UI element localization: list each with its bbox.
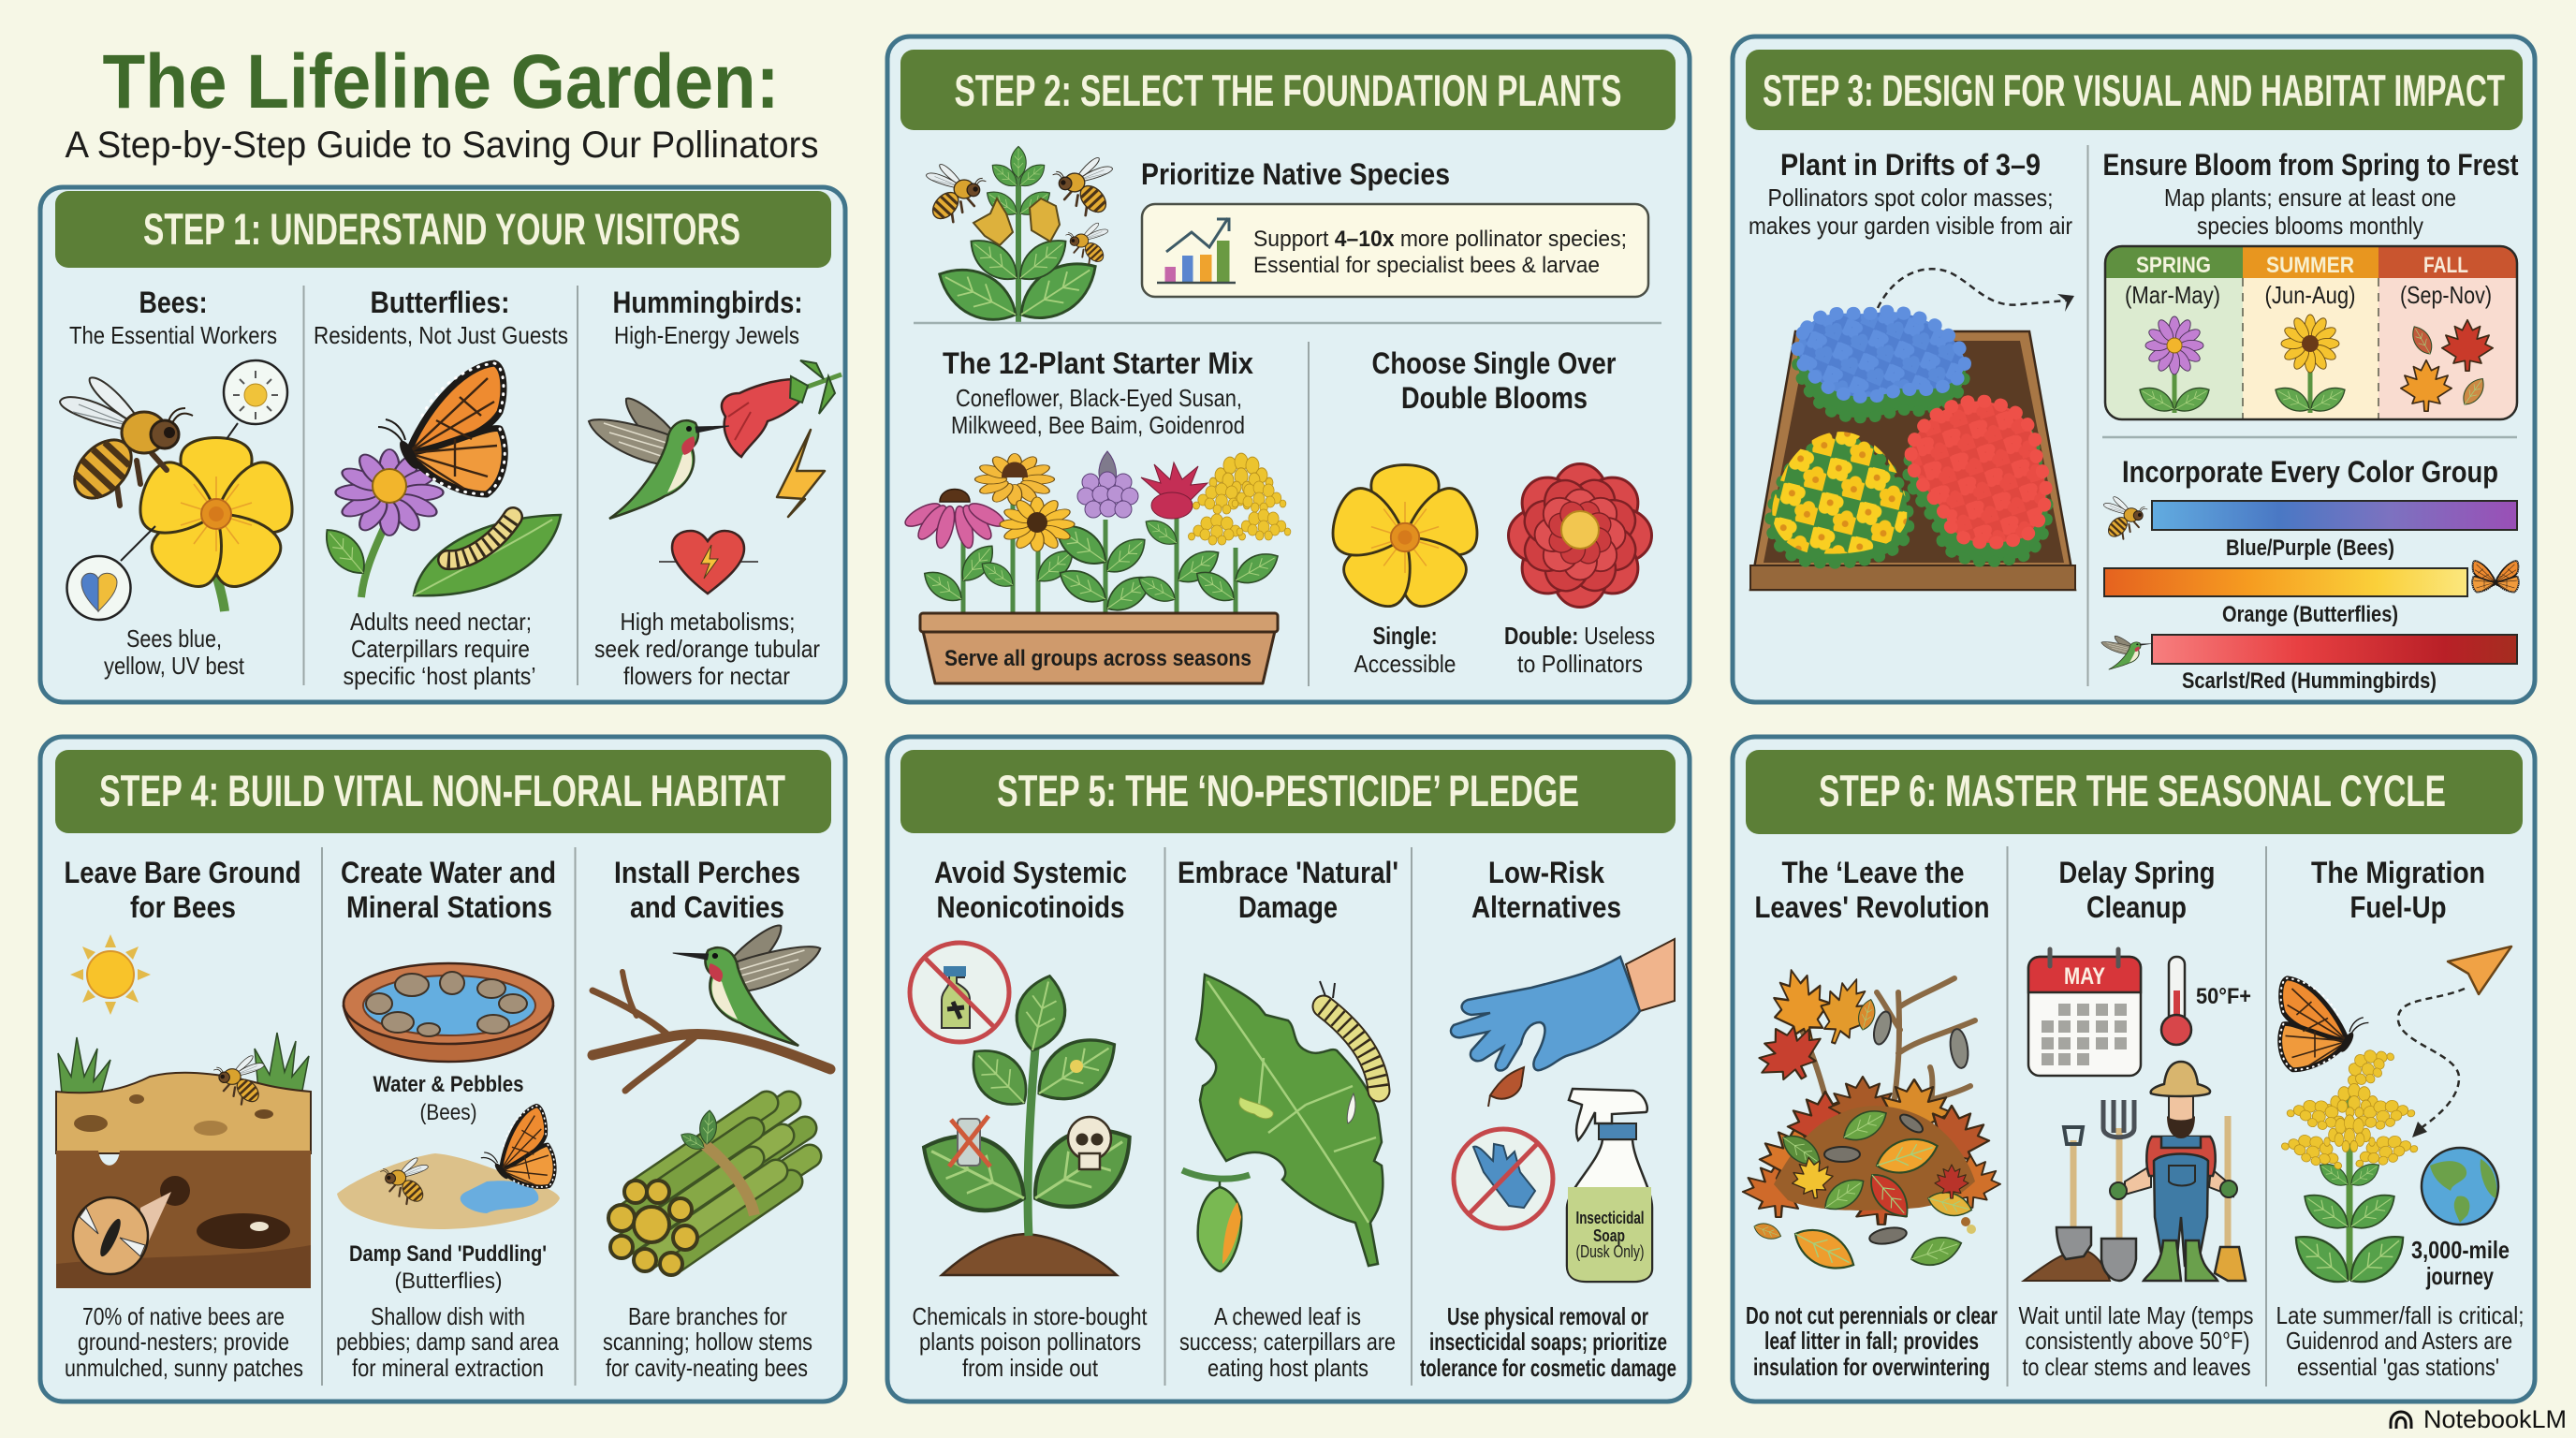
alternatives note: [1420, 1302, 1676, 1382]
hummingbirds note: flowers for nectar: [623, 662, 790, 690]
panel frame: [40, 187, 845, 702]
natural damage heading: Embrace 'Natural': [1178, 856, 1398, 889]
neonicotinoids heading: Avoid Systemic: [934, 856, 1127, 889]
color bar: hummingbirds: [2101, 635, 2517, 694]
water note: Shallow dish with: [371, 1302, 525, 1330]
bees subheading: The Essential Workers: [69, 321, 277, 349]
icon: sun vision bubble: [224, 360, 287, 439]
cleanup note: [2018, 1301, 2254, 1381]
journey label: journey: [2425, 1262, 2494, 1290]
panel: step 6 master the seasonal cycle: [1733, 737, 2535, 1401]
perches note: Bare branches for: [628, 1302, 787, 1330]
season table: SPRING: [2136, 253, 2211, 278]
migration heading: [2311, 856, 2485, 924]
water note: pebbies; damp sand area: [336, 1328, 559, 1356]
icon: blue yellow heart bubble: [67, 526, 155, 620]
step 2 header: STEP 2: SELECT THE FOUNDATION PLANTS: [955, 66, 1621, 115]
alternatives note: tolerance for cosmetic damage: [1420, 1354, 1676, 1382]
icon: double bloom: [1504, 460, 1656, 611]
natural damage note: success; caterpillars are: [1179, 1328, 1396, 1356]
prioritize native species heading: Prioritize Native Species: [1141, 157, 1450, 191]
icon: chrysalis: [1182, 1170, 1250, 1271]
icon: thermometer 50F: [2161, 957, 2251, 1045]
bees heading: Bees:: [139, 286, 208, 319]
step 1 header: [55, 191, 831, 268]
icon: heart with bolt: [659, 531, 758, 594]
water heading: Mineral Stations: [346, 890, 552, 924]
panel: step 2 select the foundation plants: [887, 37, 1690, 702]
icon: hummingbird: [589, 398, 729, 519]
butterflies note: [343, 608, 535, 690]
migration note: essential 'gas stations': [2297, 1353, 2499, 1381]
bloom text: species blooms monthly: [2197, 212, 2423, 240]
icon: native plant with bees: [927, 146, 1112, 333]
neonicotinoids note: plants poison pollinators: [919, 1328, 1141, 1356]
cleanup note: Wait until late May (temps: [2018, 1301, 2254, 1329]
icon: summer flower: [2271, 315, 2349, 418]
bloom text: Map plants; ensure at least one: [2164, 183, 2456, 212]
icon: gloved hand removing leaf: [1451, 939, 1675, 1107]
double label: [1504, 622, 1655, 678]
alternatives note: Use physical removal or: [1447, 1302, 1648, 1330]
icon: fall leaves: [2401, 320, 2493, 411]
icon: insecticidal soap bottle: (Dusk Only): [1576, 1242, 1644, 1261]
column: butterflies: [314, 286, 568, 690]
icon: sun: [70, 934, 151, 1015]
icon: spring flower: [2135, 316, 2214, 418]
subtitle: A Step-by-Step Guide to Saving Our Pollinators: [66, 125, 818, 166]
icon: yellow flower with stem: [133, 438, 300, 611]
season table: (Mar-May): [2125, 281, 2220, 309]
step 5 header: STEP 5: THE ‘NO-PESTICIDE’ PLEDGE: [997, 766, 1579, 815]
arrow: migration route: [2398, 989, 2465, 1137]
step 2 header: [900, 50, 1676, 130]
cleanup heading: Cleanup: [2086, 890, 2187, 924]
perches note: for cavity-neating bees: [606, 1354, 808, 1382]
bare ground note: 70% of native bees are: [82, 1302, 285, 1330]
cleanup heading: [2059, 856, 2215, 924]
perches note: [603, 1302, 812, 1382]
starter mix list: [951, 384, 1245, 439]
column: neonicotinoids: [908, 856, 1149, 1382]
journey label: 3,000-mile: [2411, 1236, 2510, 1264]
column: perches and cavities: [593, 856, 830, 1382]
notebooklm logo: NotebookLM: [2423, 1405, 2567, 1433]
panel: step 4 build vital non-floral habitat: [40, 737, 845, 1401]
choose single heading: Choose Single Over: [1372, 346, 1616, 380]
title: The Lifeline Garden:: [103, 39, 779, 125]
neonicotinoids note: from inside out: [962, 1354, 1099, 1382]
step 5 header: [900, 750, 1676, 833]
panel frame: [1733, 737, 2535, 1401]
icon: growth chart: [1157, 218, 1236, 283]
column: water and mineral stations: [336, 856, 560, 1382]
choose single heading: [1372, 346, 1616, 415]
hummingbirds heading: Hummingbirds:: [612, 286, 803, 319]
panel: step 5 the no-pesticide pledge: [887, 737, 1690, 1401]
column: leave the leaves: [1743, 856, 2000, 1381]
hummingbirds note: [594, 608, 820, 690]
icon: monarch on goldenrod: [2280, 978, 2368, 1070]
butterflies subheading: Residents, Not Just Guests: [314, 321, 568, 349]
icon: insecticidal soap bottle: [1567, 1089, 1652, 1282]
icon: gardener: [2110, 1062, 2237, 1281]
leaves heading: [1754, 856, 1990, 924]
leaves note: Do not cut perennials or clear: [1746, 1301, 1998, 1329]
planter box: [920, 613, 1278, 683]
sand label: Damp Sand 'Puddling': [349, 1241, 547, 1267]
alternatives note: insecticidal soaps; prioritize: [1429, 1328, 1667, 1356]
column: natural damage: [1178, 856, 1398, 1382]
cleanup note: consistently above 50°F): [2026, 1327, 2250, 1355]
leaves note: leaf litter in fall; provides: [1764, 1327, 1979, 1355]
bare ground heading: Leave Bare Ground: [64, 856, 301, 889]
double label: to Pollinators: [1517, 650, 1643, 678]
callout text: Support 4–10x more pollinator species;: [1253, 227, 1627, 252]
icon: thermometer 50F: 50°F+: [2196, 984, 2251, 1009]
color bar: butterflies: Orange (Butterflies): [2222, 602, 2398, 627]
season table: (Sep-Nov): [2400, 281, 2492, 309]
bare ground heading: [64, 856, 301, 924]
bees note: Sees blue,: [126, 624, 222, 653]
bloom text: [2164, 183, 2456, 240]
neonicotinoids note: Chemicals in store-bought: [912, 1302, 1148, 1330]
column: bare ground: [56, 856, 311, 1382]
color group heading: Incorporate Every Color Group: [2122, 455, 2498, 489]
hummingbirds subheading: High-Energy Jewels: [614, 321, 799, 349]
water heading: Create Water and: [341, 856, 556, 889]
panel frame: [887, 737, 1690, 1401]
sand label: [349, 1241, 547, 1294]
icon: paper plane: [2448, 946, 2511, 994]
color bar: hummingbirds: Scarlst/Red (Hummingbirds): [2182, 668, 2437, 694]
migration note: Guidenrod and Asters are: [2286, 1327, 2512, 1355]
perches heading: and Cavities: [630, 890, 784, 924]
icon: hollow stem bundle: [608, 1103, 810, 1275]
icon: flowers in planter: [902, 451, 1291, 683]
neonicotinoids note: [912, 1302, 1148, 1382]
neonicotinoids heading: [934, 856, 1127, 924]
icon: perched hummingbird: [673, 925, 820, 1046]
sand label: (Butterflies): [395, 1269, 502, 1294]
perches note: scanning; hollow stems: [603, 1328, 812, 1356]
icon: lightning bolt: [777, 430, 825, 517]
icon: insecticidal soap bottle: Soap: [1593, 1226, 1625, 1245]
callout text: Essential for specialist bees & larvae: [1253, 253, 1600, 278]
water note: for mineral extraction: [352, 1354, 544, 1382]
step 4 header: [55, 750, 831, 833]
perches heading: [614, 856, 800, 924]
water label: [373, 1072, 524, 1125]
leaves heading: The ‘Leave the: [1782, 856, 1964, 889]
planter box: Serve all groups across seasons: [944, 646, 1251, 671]
cleanup note: to clear stems and leaves: [2022, 1353, 2250, 1381]
column: bees: [60, 286, 300, 680]
icon: leaf pile with twigs: [1743, 963, 2000, 1279]
drifts text: [1749, 183, 2072, 240]
single label: [1354, 622, 1456, 678]
icon: prohibited harsh glove: [1454, 1129, 1553, 1228]
icon: may calendar: MAY: [2064, 963, 2105, 990]
natural damage heading: Damage: [1238, 890, 1338, 924]
icon: insecticidal soap bottle: Insecticidal: [1576, 1209, 1644, 1227]
natural damage note: A chewed leaf is: [1214, 1302, 1361, 1330]
perches heading: Install Perches: [614, 856, 800, 889]
icon: prohibited pesticide spray: [910, 943, 1009, 1042]
bare ground heading: for Bees: [130, 890, 236, 924]
step 1 header: STEP 1: UNDERSTAND YOUR VISITORS: [143, 204, 740, 254]
icon: red tubular flower: [722, 360, 842, 457]
migration note: [2276, 1301, 2524, 1381]
water heading: [341, 856, 556, 924]
butterflies note: Caterpillars require: [351, 635, 530, 663]
color bar: bees: Blue/Purple (Bees): [2226, 536, 2394, 561]
step 6 header: [1746, 750, 2523, 834]
double label: Double: Useless: [1504, 622, 1655, 650]
icon: poisoned plant: [908, 971, 1149, 1275]
icon: garden tools and soil: [2024, 1100, 2246, 1281]
bees note: [104, 624, 245, 680]
column: delay spring cleanup: [2018, 856, 2254, 1381]
column: low-risk alternatives: [1420, 856, 1676, 1382]
arrow: flight path: [1878, 269, 2074, 312]
natural damage note: [1179, 1302, 1396, 1382]
water note: [336, 1302, 559, 1382]
icon: bare branch: [593, 972, 830, 1091]
icon: bee: [60, 377, 193, 509]
bare ground note: ground-nesters; provide: [78, 1328, 289, 1356]
bare ground note: unmulched, sunny patches: [65, 1354, 303, 1382]
choose single heading: Double Blooms: [1401, 381, 1588, 415]
water label: Water & Pebbles: [373, 1072, 524, 1097]
panel: step 1 understand your visitors: [40, 187, 845, 702]
drifts text: Pollinators spot color masses;: [1767, 183, 2054, 212]
water label: (Bees): [419, 1100, 477, 1125]
migration note: Late summer/fall is critical;: [2276, 1301, 2524, 1329]
panel frame: [40, 737, 845, 1401]
butterflies heading: Butterflies:: [371, 286, 509, 319]
starter mix list: Coneflower, Black-Eyed Susan,: [956, 384, 1242, 412]
color bar: bees: [2103, 497, 2517, 561]
neonicotinoids heading: Neonicotinoids: [936, 890, 1125, 924]
icon: may calendar: [2028, 949, 2141, 1076]
journey label: [2411, 1236, 2510, 1290]
starter mix heading: The 12-Plant Starter Mix: [943, 346, 1253, 380]
icon: single bloom: [1325, 465, 1485, 616]
column: migration fuel-up: [2276, 856, 2524, 1381]
icon: goldenrod plant: [2279, 1037, 2420, 1293]
butterflies note: Adults need nectar;: [350, 608, 532, 636]
alternatives heading: [1471, 856, 1621, 924]
season table: (Jun-Aug): [2265, 281, 2355, 309]
season table: FALL: [2423, 253, 2468, 278]
alternatives heading: Alternatives: [1471, 890, 1621, 924]
natural damage heading: [1178, 856, 1398, 924]
column: hummingbirds: [589, 286, 842, 690]
alternatives heading: Low-Risk: [1488, 856, 1604, 889]
season table: [2105, 246, 2517, 419]
hummingbirds note: seek red/orange tubular: [594, 635, 820, 663]
season table: SUMMER: [2266, 253, 2354, 278]
step 3 header: [1746, 50, 2523, 130]
icon: raised garden bed with color drifts: [1750, 312, 2075, 590]
icon: chewed leaf with caterpillar: [1196, 975, 1383, 1266]
icon: globe: [2422, 1148, 2498, 1225]
migration heading: Fuel-Up: [2349, 890, 2447, 924]
bare ground note: [65, 1302, 303, 1382]
natural damage note: eating host plants: [1208, 1354, 1368, 1382]
bees note: yellow, UV best: [104, 652, 245, 680]
step 4 header: STEP 4: BUILD VITAL NON-FLORAL HABITAT: [99, 766, 785, 815]
migration heading: The Migration: [2311, 856, 2485, 889]
panel frame: [1733, 37, 2535, 702]
icon: water dish with pebbles: [344, 963, 553, 1062]
callout text: [1253, 227, 1627, 278]
butterflies note: specific ‘host plants’: [343, 662, 535, 690]
single label: Accessible: [1354, 650, 1456, 678]
drifts text: makes your garden visible from air: [1749, 212, 2072, 240]
icon: damp sand with bee and butterfly: [337, 1105, 560, 1229]
panel: step 3 design for visual and habitat impact: [1733, 37, 2535, 702]
color bar: butterflies: [2104, 561, 2519, 627]
icon: caterpillar on leaf: [414, 515, 561, 595]
icon: purple daisy: [316, 449, 444, 597]
hummingbirds note: High metabolisms;: [620, 608, 796, 636]
drifts heading: Plant in Drifts of 3–9: [1780, 148, 2041, 182]
single label: Single:: [1372, 622, 1438, 650]
icon: soil cross-section with nesting bees: [56, 1033, 311, 1288]
panel frame: [887, 37, 1690, 702]
icon: monarch butterfly: [378, 363, 505, 494]
cleanup heading: Delay Spring: [2059, 856, 2215, 889]
leaves heading: Leaves' Revolution: [1754, 890, 1990, 924]
starter mix list: Milkweed, Bee Baim, Goidenrod: [951, 411, 1245, 439]
leaves note: [1746, 1301, 1998, 1381]
callout: native species benefit: [1142, 204, 1648, 297]
leaves note: insulation for overwintering: [1753, 1353, 1990, 1381]
